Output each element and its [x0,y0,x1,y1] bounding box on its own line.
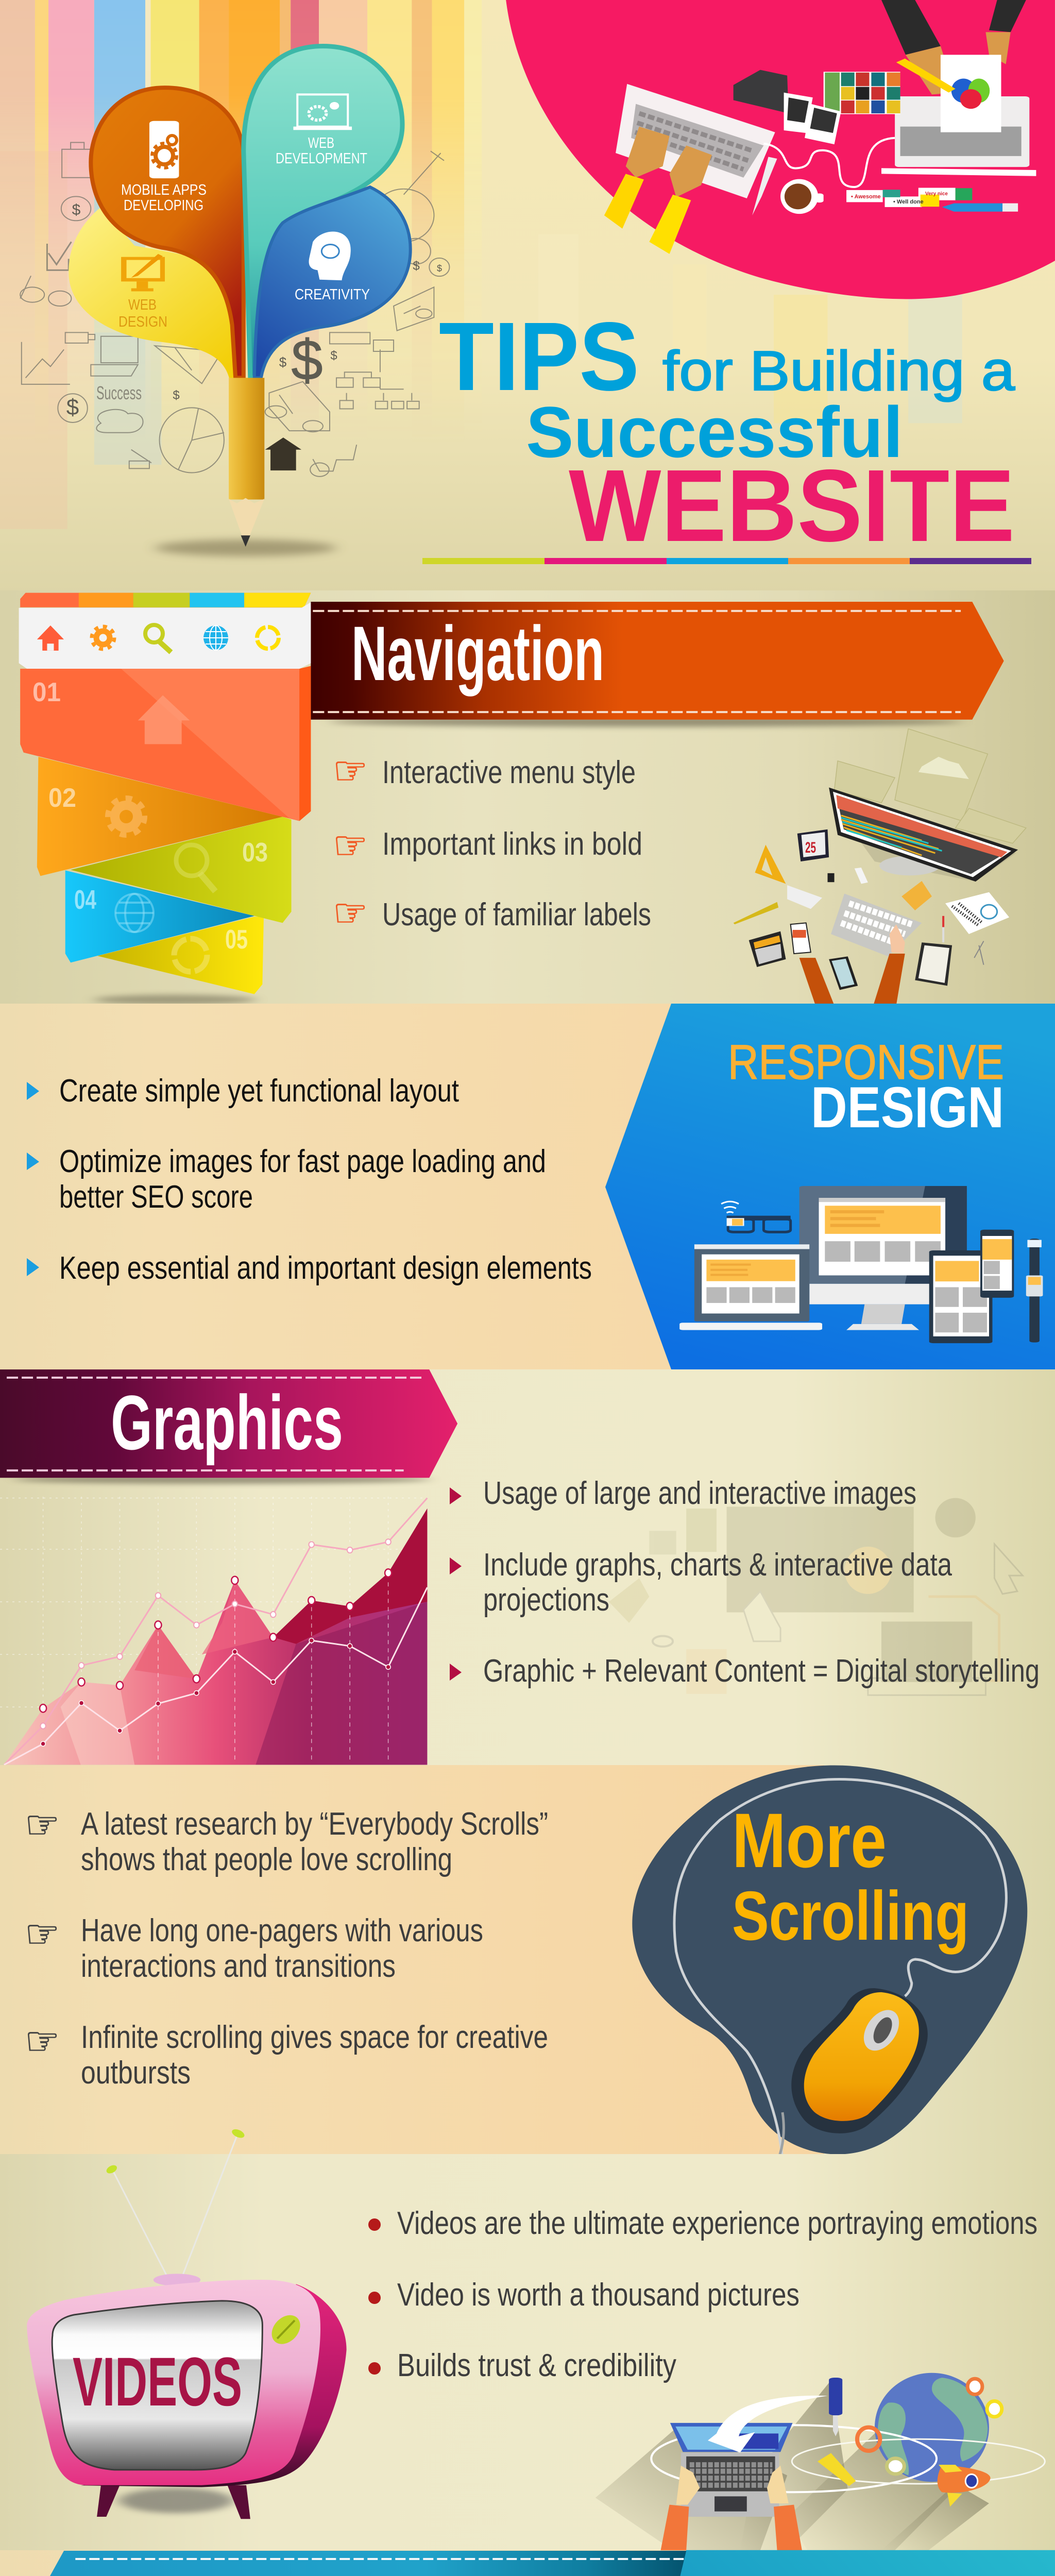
cable end [760,2112,784,2192]
panel: responsive design [0,1004,1055,1369]
small note labels: Very nice [925,191,948,197]
navigation bullets [333,748,651,936]
title: Successful [526,392,903,472]
scrolling heading: More [732,1797,887,1884]
calendar date: 25 [805,839,816,856]
videos bullets: Video is worth a thousand pictures [397,2277,799,2313]
title: WEBSITE [569,449,1015,563]
navigation bullets: Important links in bold [382,826,642,862]
responsive heading [728,1035,1004,1140]
navigation bullets: Interactive menu style [382,755,636,790]
creativity balloon [254,187,411,378]
doodles [20,142,449,477]
scrolling bullets: ☞ [25,1911,60,1957]
small note labels: • Well done [893,199,924,205]
balloon icons [121,94,352,291]
graphics ribbon [0,1369,457,1484]
doodle dollars: $ [437,263,442,274]
menu icons [92,625,279,972]
doodle dollars: $ [330,349,337,363]
colour stripes background [0,0,482,401]
desk illustration [604,0,1036,254]
peach band [0,1765,824,2154]
scrolling bullets: outbursts [81,2055,191,2091]
phone gear icon [152,135,177,168]
balloon labels: MOBILE APPS [121,182,207,198]
graphics bullets: Usage of large and interactive images [483,1476,916,1511]
graphics bullets: projections [483,1582,609,1618]
navigation bullets: ☞ [333,748,368,793]
scrolling bullets: Infinite scrolling gives space for creative [81,2020,548,2055]
statistics blue shape [624,2550,1055,2576]
scrolling bullets: shows that people love scrolling [81,1842,452,1877]
panel: more scrolling [0,1765,1055,2192]
line and area chart [0,1497,427,1765]
balloon labels [118,135,370,330]
workspace illustration [734,729,1026,1005]
menu numbers: 04 [74,885,96,915]
small note labels [851,191,948,205]
navigation heading: Navigation [351,610,604,697]
mobile-apps balloon [91,88,244,378]
responsive background [0,1004,1055,1369]
scrolling heading: Scrolling [732,1877,969,1955]
responsive bullets [27,1073,592,1286]
faint lower stripes [0,151,962,529]
balloon labels: CREATIVITY [295,286,370,303]
mouse pad [632,1766,1027,2155]
statistics background [0,2550,1055,2576]
panel: website statistics [0,2550,1055,2576]
folded menu graphic [19,593,311,1005]
navigation bullets: ☞ [333,890,368,936]
graphics bullets: Include graphs, charts & interactive data [483,1547,952,1583]
navigation background [0,590,1055,1004]
videos background [0,2154,1055,2550]
faded illustration [609,1498,1023,1695]
television [27,2129,347,2519]
panel: header [0,0,1055,592]
mouse cable [674,1779,1006,2162]
panel: videos [0,2129,1055,2550]
scrolling bullets: ☞ [25,1802,60,1848]
videos bullets: Builds trust & credibility [397,2348,676,2383]
balloon labels: WEB [128,297,157,313]
header background [0,0,1055,592]
responsive devices [679,1186,1043,1343]
doodle dollars: $ [279,354,287,370]
doodle dollars [66,201,442,420]
scrolling heading [732,1797,969,1955]
menu numbers: 03 [242,838,268,868]
balloon labels: DEVELOPMENT [276,150,367,167]
responsive heading: RESPONSIVE [728,1035,1004,1090]
title colour bar [422,558,1031,564]
balloon labels: DEVELOPING [124,197,203,214]
title [439,302,1015,563]
scrolling bullets: Have long one-pagers with various [81,1913,483,1948]
navigation bullets: ☞ [333,822,368,868]
menu numbers [32,677,268,955]
title: for Building a [662,340,1015,402]
small note labels: • Awesome [851,194,881,200]
videos bullets [368,2206,1037,2383]
scrolling background [0,1765,1055,2154]
responsive heading: DESIGN [811,1075,1004,1140]
scrolling bullets: ☞ [25,2018,60,2064]
doodle dollars: $ [413,259,420,273]
responsive bullets: Create simple yet functional layout [59,1073,459,1109]
graphics background [0,1369,1055,1765]
responsive bullets: Keep essential and important design elements [59,1250,592,1286]
balloon labels: DESIGN [118,314,167,330]
doodle dollars: $ [173,388,180,402]
graphics heading: Graphics [111,1379,343,1466]
doodle dollars: Success [96,382,142,403]
scrolling bullets: interactions and transitions [81,1948,396,1984]
scrolling bullets: A latest research by “Everybody Scrolls” [81,1806,548,1842]
responsive bullets: Optimize images for fast page loading and [59,1144,546,1179]
panel: navigation [0,590,1055,1005]
navigation ribbon [311,602,1004,727]
computer mouse [791,1988,928,2133]
graphics bullets [450,1476,1040,1689]
doodle house [265,437,301,470]
pink desk circle [506,0,1055,299]
panel: graphics [0,1369,1055,1765]
menu numbers: 02 [48,783,76,813]
doodle dollars: $ [72,201,81,218]
globe and laptop illustration [595,2373,1045,2550]
blue shape [605,1004,1055,1369]
title: TIPS [439,302,639,411]
web-design balloon [69,207,244,382]
balloon labels: WEB [308,135,334,151]
tv label: VIDEOS [73,2344,242,2420]
responsive bullets: better SEO score [59,1179,253,1215]
scrolling bullets [25,1802,548,2091]
web-development balloon [244,46,402,378]
statistics ribbon [31,2551,686,2576]
pencil [155,378,336,556]
doodle dollars: $ [291,329,323,392]
doodle dollars: $ [66,395,79,420]
menu numbers: 05 [225,925,248,955]
navigation bullets: Usage of familiar labels [382,897,651,933]
menu numbers: 01 [32,677,61,707]
